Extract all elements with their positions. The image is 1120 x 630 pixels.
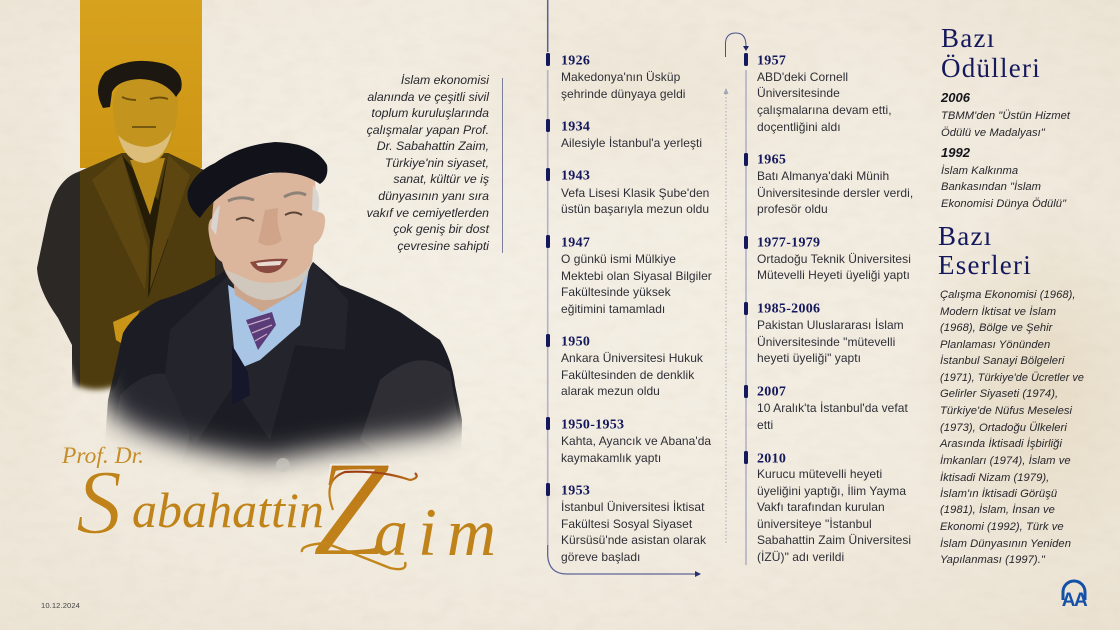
works list: (1968), Bölge ve Şehir: [940, 322, 1054, 334]
works list: İslam'ın İktisadi Görüşü: [940, 488, 1057, 500]
first name: S: [76, 451, 122, 553]
entry 2010: üniversiteye "İstanbul: [757, 517, 872, 531]
entry 1965: Batı Almanya'daki Münih: [757, 169, 889, 183]
portrait: sepia figure behind: [37, 61, 226, 395]
heading: Bazı Ödülleri: [941, 23, 1041, 83]
works list: Modern İktisat ve İslam: [940, 306, 1056, 318]
entry 1943: 1943: [561, 168, 590, 184]
entry 1950-1953: 1950-1953: [561, 418, 624, 432]
works list: Arasında İktisadi İşbirliği: [939, 438, 1062, 450]
entry 1953: Fakültesi Sosyal Siyaset: [561, 517, 693, 531]
portrait: main figure: [100, 142, 462, 510]
entry 1957: 1957: [757, 54, 786, 68]
entry 1943: üstün başarıyla mezun oldu: [561, 202, 709, 216]
entry 1926: Makedonya'nın Üsküp: [561, 70, 681, 84]
award 2006: 2006: [940, 90, 971, 105]
works list: (1971), Türkiye'de Ücretler ve: [940, 372, 1084, 384]
entry 1977-1979: 1977-1979: [757, 236, 820, 250]
intro text: Türkiye'nin siyaset,: [385, 156, 489, 170]
timeline column 1 entries: [546, 53, 712, 564]
surname: aim: [374, 494, 496, 570]
entry 1947: O günkü ismi Mülkiye: [561, 252, 676, 266]
entry 1953: 1953: [561, 484, 590, 498]
entry 2010: Vakfı tarafından kurulan: [757, 500, 885, 514]
icon: AA logo: [1062, 581, 1088, 611]
entry 1985-2006: [744, 302, 904, 365]
award 2006: Ödülü ve Madalyası": [941, 127, 1046, 139]
works list: Planlaması Yönünden: [940, 339, 1050, 351]
entry 1926: [546, 53, 686, 101]
entry 1957: doçentliğini aldı: [757, 120, 841, 134]
entry 1950: alarak mezun oldu: [561, 384, 660, 398]
surname: Z: [312, 432, 390, 585]
works list: (1981), İslam, İnsan ve: [940, 504, 1055, 516]
entry 1934: [546, 119, 702, 150]
entry 1977-1979: Mütevelli Heyeti üyeliği yaptı: [757, 268, 910, 282]
coat shading: [360, 360, 458, 444]
entry 1943: [546, 168, 709, 216]
entry 1950: [546, 334, 704, 398]
shirt: [228, 270, 309, 366]
coat: [106, 262, 462, 480]
neck: [234, 280, 304, 312]
entry 1947: [546, 235, 712, 316]
entry 1947: 1947: [561, 236, 590, 250]
intro text: [367, 73, 490, 253]
entry 2010: (İZÜ)" adı verildi: [757, 550, 844, 564]
entry 1950-1953: kaymakamlık yaptı: [561, 451, 661, 465]
timeline column 2 axis: [745, 70, 747, 565]
works list: Çalışma Ekonomisi (1968),: [940, 289, 1076, 301]
entry 1943: Vefa Lisesi Klasik Şube'den: [561, 186, 709, 200]
award 1992: İslam Kalkınma: [941, 165, 1018, 177]
eyes and brows: [228, 193, 306, 201]
entry 2010: 2010: [757, 452, 786, 466]
entry 1953: göreve başladı: [561, 550, 640, 564]
entry 1957: ABD'deki Cornell: [757, 70, 848, 84]
entry 1934: Ailesiyle İstanbul'a yerleşti: [561, 136, 702, 150]
date: 10.12.2024: [41, 601, 80, 610]
gold vertical band: [80, 0, 202, 168]
works list: Gelirler Siyaseti (1974),: [940, 388, 1058, 400]
entry 1957: [744, 53, 892, 134]
entry 1950-1953: Kahta, Ayancık ve Abana'da: [561, 434, 711, 448]
beret: [98, 61, 182, 108]
entry 1957: Üniversitesinde: [757, 86, 840, 100]
heading: Bazı Eserleri: [938, 221, 1032, 280]
first name: [76, 451, 324, 553]
heading: Bazı Eserleri: Bazı: [938, 221, 992, 251]
jacket: [37, 153, 226, 395]
entry 1953: Kürsüsü'nde asistan olarak: [561, 533, 707, 547]
heading: Bazı Ödülleri: Ödülleri: [941, 53, 1041, 83]
name: Prof. Dr. Sabahattin Zaim: [61, 432, 496, 585]
works list: İslam Dünyasının Yeniden: [940, 538, 1071, 550]
entry 1965: Üniversitesinde dersler verdi,: [757, 186, 913, 200]
entry 1926: 1926: [561, 54, 590, 68]
intro text: İslam ekonomisi: [401, 73, 490, 87]
icon: AA logo: AA: [1062, 590, 1088, 611]
entry 2007: 10 Aralık'ta İstanbul'da vefat: [757, 401, 908, 415]
entry 1947: Fakültesinde yüksek: [561, 285, 672, 299]
entry 1953: İstanbul Üniversitesi İktisat: [561, 500, 705, 514]
entry 1965: profesör oldu: [757, 202, 828, 216]
entry 1953: [546, 483, 707, 564]
intro text: alanında ve çeşitli sivil: [367, 90, 490, 104]
award 1992: Bankasından "İslam: [941, 181, 1041, 193]
intro text: dünyasının yanı sıra: [378, 189, 489, 203]
intro text: çalışmalar yapan Prof.: [367, 123, 489, 137]
works list: Yapılanması (1997).": [940, 554, 1046, 566]
intro rule: [502, 78, 503, 253]
entry 2007: 2007: [757, 384, 786, 400]
entry 1985-2006: heyeti üyeliği" yaptı: [757, 351, 861, 365]
entry 1950: 1950: [561, 334, 590, 350]
entry 1965: 1965: [757, 152, 786, 168]
face: [208, 165, 325, 300]
works list: [939, 289, 1084, 566]
first name: abahattin: [132, 482, 324, 538]
timeline column 1 axis: [548, 0, 701, 577]
works list: İmkanları (1974), İslam ve: [940, 455, 1071, 467]
entry 1965: [744, 152, 913, 216]
mouth: [250, 259, 288, 273]
entry 2010: üyeliğini yaptığı, İlim Yayma: [757, 484, 906, 498]
title prefix: Prof. Dr.: [61, 443, 144, 468]
head: [113, 75, 178, 163]
entry 1977-1979: Ortadoğu Teknik Üniversitesi: [757, 252, 911, 266]
intro text: sanat, kültür ve iş: [393, 172, 489, 186]
entry 1926: şehrinde dünyaya geldi: [561, 87, 686, 101]
award 2006: [940, 90, 1071, 139]
award 1992: [941, 145, 1067, 210]
entry 2010: Sabahattin Zaim Üniversitesi: [757, 533, 911, 547]
entry 2007: etti: [757, 418, 773, 432]
entry 1977-1979: [744, 236, 911, 282]
beret: [188, 142, 327, 218]
entry 1985-2006: Üniversitesinde "mütevelli: [757, 335, 895, 349]
heading: Bazı Eserleri: Eserleri: [938, 250, 1032, 280]
heading: Bazı Ödülleri: Bazı: [941, 23, 995, 53]
entry 1934: 1934: [561, 120, 590, 134]
award 1992: 1992: [941, 145, 971, 160]
entry 1950: Ankara Üniversitesi Hukuk: [561, 351, 704, 365]
entry 1947: eğitimini tamamladı: [561, 302, 665, 316]
entry 2007: [744, 384, 908, 432]
connector arrow between columns: [724, 33, 749, 543]
entry 2010: [744, 451, 911, 564]
intro text: çevresine sahipti: [397, 239, 490, 253]
entry 1985-2006: 1985-2006: [757, 302, 820, 316]
timeline column 2 entries: [744, 53, 913, 564]
award 2006: TBMM'den "Üstün Hizmet: [941, 110, 1071, 122]
surname: [302, 432, 496, 585]
works list: İktisadi Nizam (1979),: [940, 472, 1049, 484]
entry 1947: Mektebi olan Siyasal Bilgiler: [561, 269, 712, 283]
beard: [226, 262, 312, 300]
works list: Türkiye'de Nüfus Meselesi: [940, 405, 1073, 417]
works list: Ekonomi (1992), Türk ve: [940, 521, 1064, 533]
entry 1985-2006: Pakistan Uluslararası İslam: [757, 318, 904, 332]
intro text: toplum kuruluşlarında: [371, 106, 489, 120]
awards list: [940, 90, 1071, 210]
tie: [246, 312, 276, 350]
intro text: Dr. Sabahattin Zaim,: [377, 139, 489, 153]
intro text: vakıf ve cemiyetlerden: [367, 206, 489, 220]
intro text: çok geniş bir dost: [393, 222, 490, 236]
award 1992: Ekonomisi Dünya Ödülü": [941, 198, 1067, 210]
entry 1950-1953: [546, 417, 711, 465]
coat button: [276, 458, 290, 472]
entry 2010: Kurucu mütevelli heyeti: [757, 467, 882, 481]
entry 1950: Fakültesinden de denklik: [561, 368, 695, 382]
entry 1957: çalışmalarına devam etti,: [757, 103, 892, 117]
hair: [211, 185, 319, 235]
works list: (1973), Ortadoğu Ülkeleri: [940, 422, 1067, 434]
works list: İstanbul Sanayi Bölgeleri: [940, 355, 1065, 367]
